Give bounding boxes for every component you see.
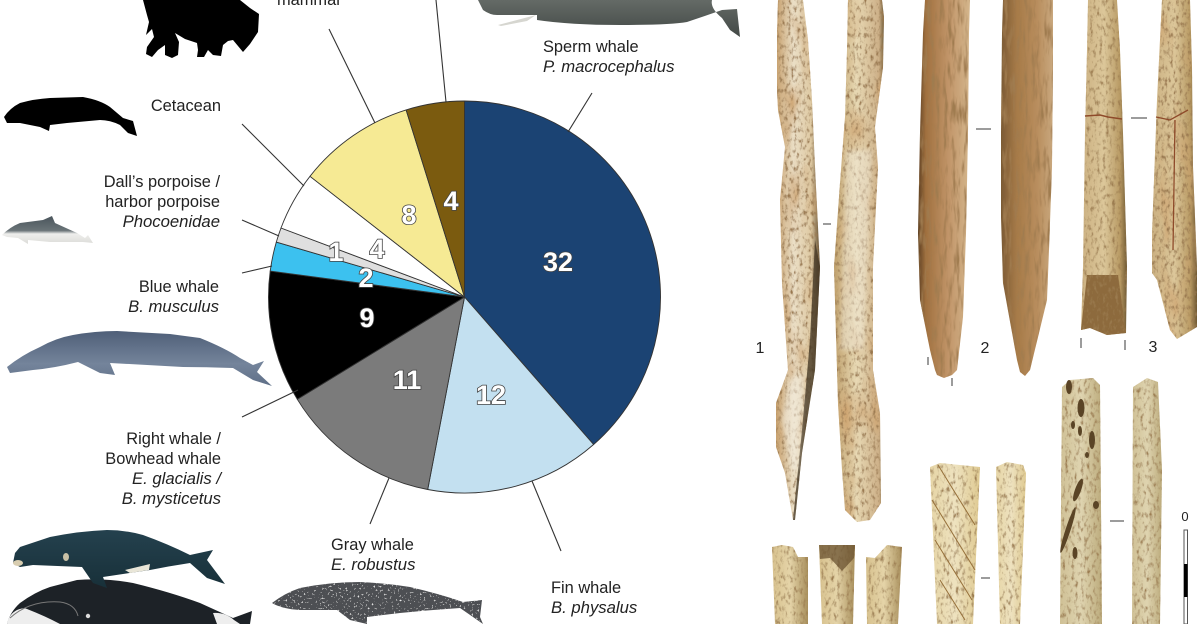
bone 3 dark broken end xyxy=(1081,275,1126,335)
slice: cetacean 4 xyxy=(281,176,464,297)
label: fin whale xyxy=(551,579,637,617)
bone 3 crack xyxy=(1085,115,1122,119)
bone 3 right view xyxy=(1152,0,1197,339)
slice: terrestrial mammal 8 xyxy=(310,110,464,297)
fragment b dark top xyxy=(819,545,855,571)
icon: bowhead whale xyxy=(7,579,252,624)
bone 6 left view xyxy=(1060,378,1102,624)
label: porpoise: Dall’s porpoise / xyxy=(104,173,220,191)
bone 3 left view xyxy=(1081,0,1127,335)
value 12: 12 xyxy=(476,380,506,410)
value 1: 1 xyxy=(328,237,344,267)
icon: right whale xyxy=(13,530,225,588)
fragment a xyxy=(772,545,808,624)
label: fin whale: Fin whale xyxy=(551,579,621,597)
icon: porpoise xyxy=(2,216,93,244)
slice: porpoise 1 xyxy=(276,228,464,297)
fragment c xyxy=(866,545,902,624)
panel: pie chart xyxy=(268,101,661,493)
slice: blue whale 2 xyxy=(270,242,464,297)
scale bar: 0 xyxy=(1181,509,1189,524)
value 9: 9 xyxy=(359,303,375,333)
slice: fin whale 12 xyxy=(428,297,594,493)
bone 2 left view xyxy=(918,0,970,378)
bone 1 right view xyxy=(834,0,884,522)
value 2: 2 xyxy=(358,263,374,293)
value 4 brown: 4 xyxy=(443,186,459,216)
icon: gray whale xyxy=(272,582,483,624)
bone 5 right view xyxy=(996,462,1026,624)
section marks xyxy=(823,118,1147,578)
bone 1 left view xyxy=(776,0,820,520)
bone 6 pits xyxy=(1058,380,1099,559)
label: porpoise xyxy=(104,173,220,231)
specimen number 1: 1 xyxy=(756,340,765,357)
label: right whale / bowhead whale: Right whale / xyxy=(126,430,221,448)
value 32: 32 xyxy=(543,247,573,277)
slice: right whale 9 xyxy=(268,271,464,399)
label: sperm whale xyxy=(543,38,674,76)
slice: gray whale 11 xyxy=(297,297,464,490)
bone 1 right pale highlight xyxy=(840,150,872,350)
icon: bison silhouette xyxy=(143,0,259,58)
label: porpoise: harbor porpoise xyxy=(105,193,220,211)
label: right whale / bowhead whale: B. mysticetus xyxy=(122,489,221,508)
bone 2 right view xyxy=(1001,0,1053,376)
panel: bone artifacts photographs xyxy=(756,0,1197,624)
specimen number 2: 2 xyxy=(981,340,990,357)
label: right whale / bowhead whale xyxy=(105,430,223,508)
bone 5 left view with incisions xyxy=(930,463,980,624)
icon: blue whale xyxy=(7,331,272,386)
label: gray whale: Gray whale xyxy=(331,536,414,554)
label: sperm whale: Sperm whale xyxy=(543,38,639,56)
label: blue whale: Blue whale xyxy=(139,278,219,296)
label: blue whale: B. musculus xyxy=(128,297,219,316)
bone 5 diagonal incisions xyxy=(932,465,975,620)
label: right whale / bowhead whale: Bowhead whale xyxy=(105,450,221,468)
label: porpoise: Phocoenidae xyxy=(123,212,220,231)
value 11: 11 xyxy=(393,365,421,395)
slice: unidentified 4 xyxy=(406,101,464,297)
leader lines xyxy=(242,0,592,551)
label: right whale / bowhead whale: E. glacialis / xyxy=(132,469,223,488)
fragment b xyxy=(819,545,855,624)
label: fin whale: B. physalus xyxy=(551,598,637,617)
label: blue whale xyxy=(128,278,219,316)
slice: sperm whale 32 xyxy=(464,101,661,444)
label: gray whale xyxy=(331,536,415,574)
icon: sperm whale xyxy=(478,0,740,37)
label: sperm whale: P. macrocephalus xyxy=(543,57,674,76)
bone 1 dark edge xyxy=(793,240,820,520)
bone 3 right crack xyxy=(1156,110,1188,250)
label: gray whale: E. robustus xyxy=(331,555,415,574)
bone 1 pale highlight xyxy=(782,372,804,470)
value 4 cetacean: 4 xyxy=(369,234,385,264)
icon: cetacean silhouette xyxy=(4,97,137,136)
value 8: 8 xyxy=(401,200,417,230)
specimen number 3: 3 xyxy=(1149,339,1158,356)
label: cetacean: Cetacean xyxy=(151,97,221,115)
bone 6 right view xyxy=(1132,378,1162,624)
scale bar xyxy=(1181,509,1189,624)
